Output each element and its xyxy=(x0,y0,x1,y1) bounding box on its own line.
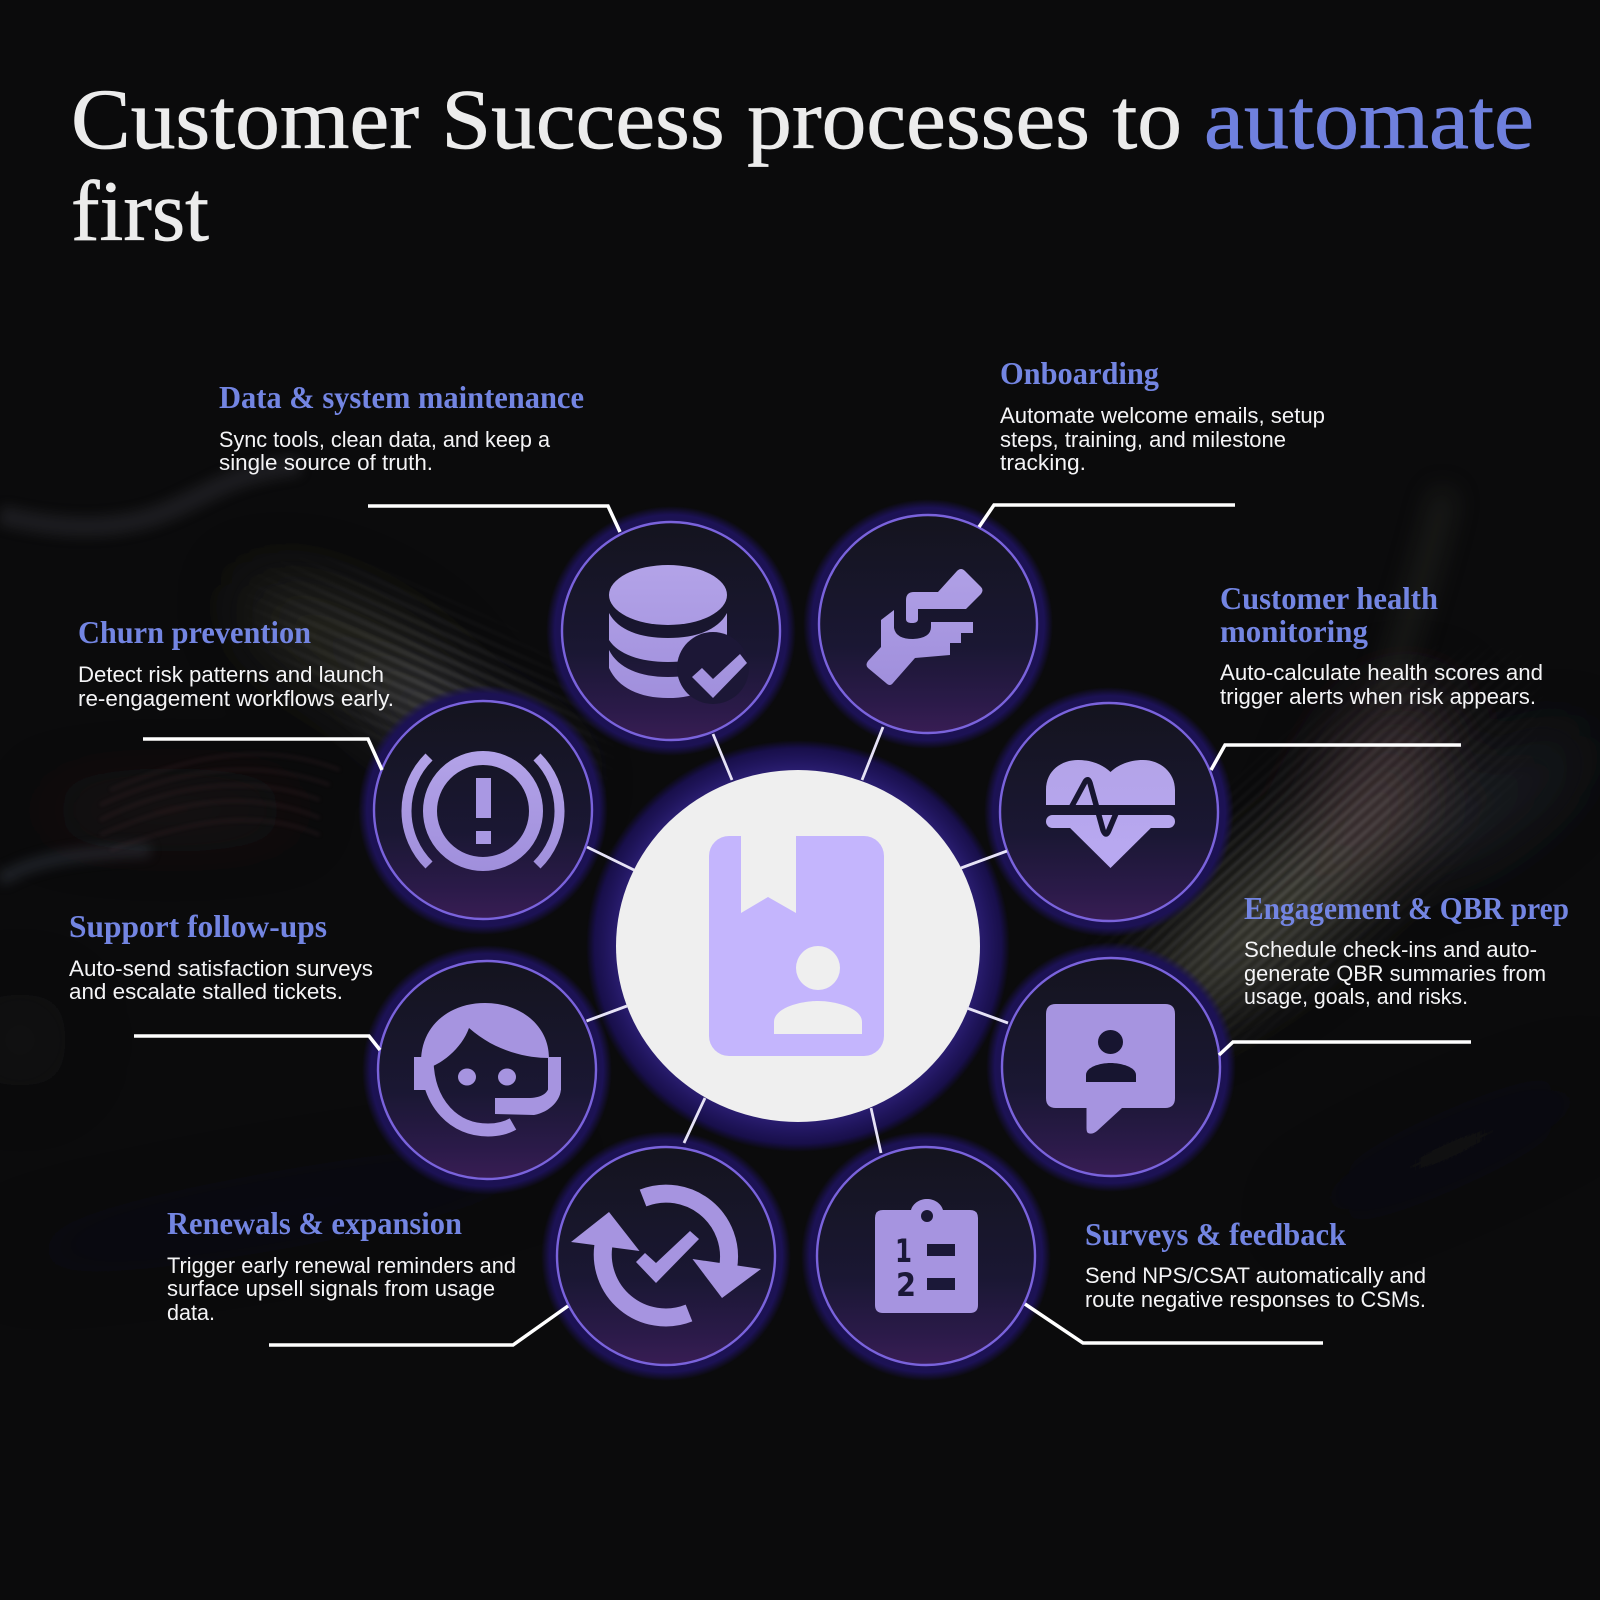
heading xyxy=(1220,580,1438,649)
callout line xyxy=(1211,745,1461,770)
description: Schedule check-ins and auto- xyxy=(1244,937,1537,962)
callout line xyxy=(134,1036,380,1050)
icon: contact book xyxy=(709,836,884,1056)
title: first xyxy=(71,163,209,259)
description xyxy=(167,1253,516,1325)
icon: circular arrows with check xyxy=(571,1194,761,1317)
description: trigger alerts when risk appears. xyxy=(1220,684,1536,709)
panel: Customer health monitoring xyxy=(961,580,1543,937)
description: Automate welcome emails, setup xyxy=(1000,403,1325,428)
connector to hub xyxy=(586,1006,627,1021)
description: route negative responses to CSMs. xyxy=(1085,1287,1426,1312)
description: data. xyxy=(167,1300,215,1325)
icon: support agent headset xyxy=(414,1003,561,1130)
panel: Surveys & feedback xyxy=(801,1108,1426,1381)
icon: speech bubble with person xyxy=(1046,1004,1175,1134)
description: Auto-send satisfaction surveys xyxy=(69,956,373,981)
description: re-engagement workflows early. xyxy=(78,686,394,711)
heading: Data & system maintenance xyxy=(219,379,584,415)
description xyxy=(1000,403,1325,475)
connector to hub xyxy=(871,1108,881,1153)
node: renew arrows xyxy=(541,1131,791,1381)
description xyxy=(78,662,394,711)
description xyxy=(1220,660,1543,709)
description: generate QBR summaries from xyxy=(1244,961,1546,986)
callout line xyxy=(1025,1304,1323,1343)
center hub xyxy=(586,740,1010,1152)
node: clipboard xyxy=(801,1131,1051,1381)
description: Detect risk patterns and launch xyxy=(78,662,384,687)
panel: Engagement & QBR prep xyxy=(967,890,1569,1192)
icon: alert ring xyxy=(406,757,560,865)
heading: Surveys & feedback xyxy=(1085,1216,1346,1252)
panel: Data & system maintenance xyxy=(219,379,796,780)
node: agent xyxy=(362,945,612,1195)
title xyxy=(71,71,1534,259)
panel: Churn prevention xyxy=(78,614,634,935)
callout line xyxy=(269,1306,568,1345)
heading: Support follow-ups xyxy=(69,908,327,944)
panel: Onboarding xyxy=(803,355,1325,780)
node: heart xyxy=(984,687,1234,937)
title: Customer Success processes to xyxy=(71,71,1182,167)
panel: Support follow-ups xyxy=(69,908,627,1195)
description: tracking. xyxy=(1000,450,1086,475)
heading: monitoring xyxy=(1220,613,1368,649)
icon: numbered clipboard: 1 xyxy=(895,1232,912,1270)
node: speech bubble xyxy=(986,942,1236,1192)
description: Auto-calculate health scores and xyxy=(1220,660,1543,685)
heading: Customer health xyxy=(1220,580,1438,616)
panel: Renewals & expansion xyxy=(167,1098,791,1381)
icon: database with check xyxy=(609,565,749,704)
description: Trigger early renewal reminders and xyxy=(167,1253,516,1278)
heading: Renewals & expansion xyxy=(167,1205,462,1241)
heading: Onboarding xyxy=(1000,355,1159,391)
callout line xyxy=(143,739,382,770)
description xyxy=(1085,1263,1426,1312)
heading: Engagement & QBR prep xyxy=(1244,890,1569,926)
description: single source of truth. xyxy=(219,450,433,475)
connector to hub xyxy=(961,851,1007,868)
title: automate xyxy=(1204,71,1534,167)
description: Sync tools, clean data, and keep a xyxy=(219,427,551,452)
description: and escalate stalled tickets. xyxy=(69,979,343,1004)
description xyxy=(219,427,551,475)
infographic canvas xyxy=(0,90,1568,1380)
connector to hub xyxy=(967,1008,1008,1023)
icon: heart pulse xyxy=(1046,760,1175,868)
node: handshake xyxy=(803,499,1053,749)
icon: numbered clipboard xyxy=(875,1199,978,1313)
node: database xyxy=(546,506,796,756)
connector to hub xyxy=(587,847,634,870)
description: Send NPS/CSAT automatically and xyxy=(1085,1263,1426,1288)
node: alert xyxy=(358,685,608,935)
connector to hub xyxy=(713,734,732,780)
icon: handshake xyxy=(866,569,982,685)
description: usage, goals, and risks. xyxy=(1244,984,1468,1009)
description: surface upsell signals from usage xyxy=(167,1276,495,1301)
description: steps, training, and milestone xyxy=(1000,427,1286,452)
callout line xyxy=(1219,1042,1471,1055)
background: base and flowing light streaks xyxy=(0,456,1564,1039)
description xyxy=(69,956,373,1004)
description xyxy=(1244,937,1546,1009)
callout line xyxy=(979,505,1235,527)
icon: numbered clipboard: 2 xyxy=(896,1266,916,1304)
heading: Churn prevention xyxy=(78,614,311,650)
callout line xyxy=(368,506,620,532)
connector to hub xyxy=(862,727,883,780)
connector to hub xyxy=(684,1098,705,1143)
